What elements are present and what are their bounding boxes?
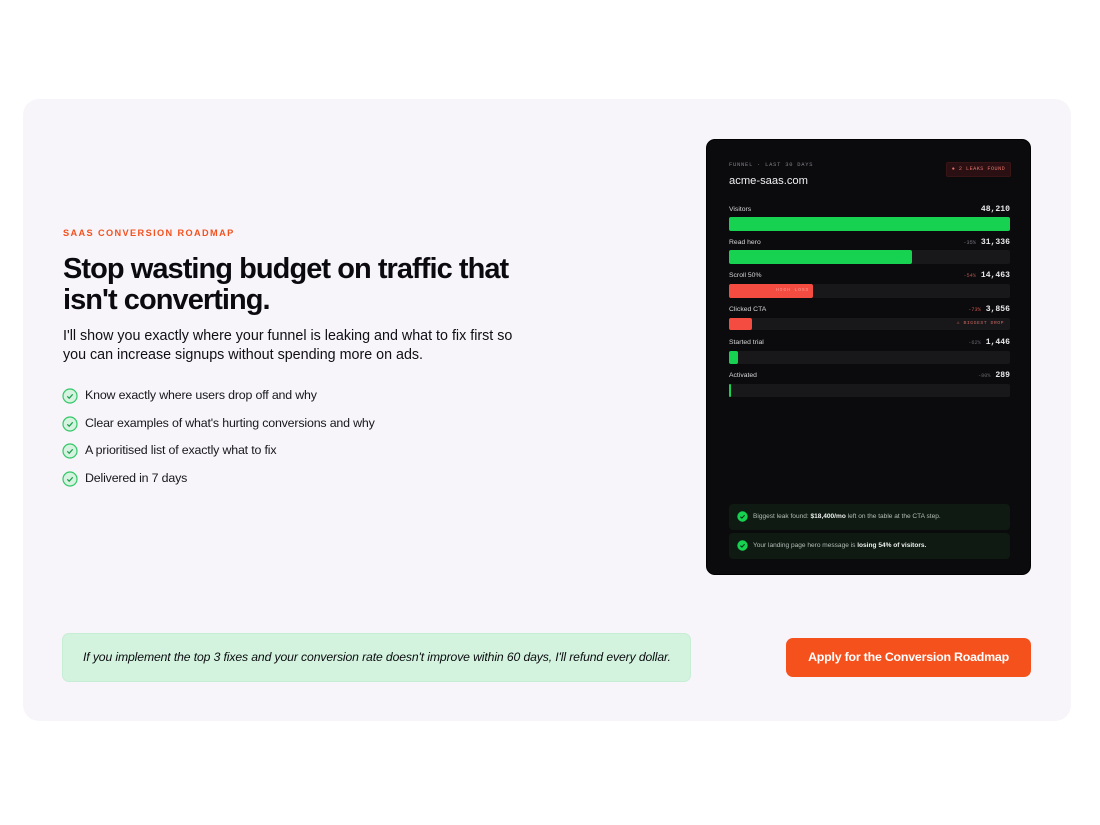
heading: isn't converting. [63,284,270,316]
heading [63,253,509,316]
bar: Clicked CTA: ⚠ BIGGEST DROP [957,321,1004,326]
bar: Scroll 50%: HIGH LOSS [776,288,809,293]
dashboard caption: FUNNEL · LAST 30 DAYS [729,162,813,168]
panel: funnel dashboard [706,139,1031,575]
subheading: you can increase signups without spending more on ads. [63,347,423,363]
insight note [729,533,1010,559]
bar: Clicked CTA [729,318,1010,330]
bar: Visitors [729,217,1010,231]
subheading [63,328,512,363]
guarantee callout [62,633,691,682]
row value: -80% 289 [978,371,1010,380]
benefit text: Clear examples of what's hurting conversions and why [85,416,375,430]
note text: Biggest leak found: $18,400/mo left on the table at the CTA step. [753,513,941,520]
badge: leaks found: ● 2 LEAKS FOUND [952,166,1005,172]
bar: Started trial [729,351,1010,364]
row label: Scroll 50%: Scroll 50% [729,272,762,279]
benefit text: Delivered in 7 days [85,471,187,485]
CTA button: Apply for the Conversion Roadmap [808,650,1009,664]
insight note [729,504,1010,530]
dashboard domain: acme-saas.com [729,175,808,187]
icon: check [737,540,748,551]
panel: main card [23,99,1071,721]
icon: check [62,471,78,487]
benefit text: Know exactly where users drop off and why [85,388,317,402]
icon: check [737,511,748,522]
eyebrow label: SAAS CONVERSION ROADMAP [63,228,235,238]
benefits list [62,388,375,487]
row label: Visitors: Visitors [729,206,751,213]
row value: -54% 14,463 [963,271,1010,280]
row value: -73% 3,856 [968,305,1010,314]
bar: Read hero [729,250,1010,264]
heading: Stop wasting budget on traffic that [63,253,508,285]
row value: -35% 31,336 [963,238,1010,247]
subheading: I'll show you exactly where your funnel is leaking and what to fix first so [63,328,512,344]
note text: Your landing page hero message is losing 54% of visitors. [753,542,926,549]
CTA button [786,638,1031,677]
row label: Activated: Activated [729,372,757,379]
row label: Clicked CTA: Clicked CTA [729,306,766,313]
bar: Activated [729,384,1010,397]
row value: -62% 1,446 [968,338,1010,347]
row value: 48,210 [981,205,1010,214]
icon: check [62,416,78,432]
row label: Read hero: Read hero [729,239,761,246]
bar: Scroll 50% [729,284,1010,298]
funnel chart [729,204,1010,398]
guarantee callout: If you implement the top 3 fixes and your conversion rate doesn't improve within 60 days, I'll refund every dollar. [83,650,671,664]
row label: Started trial: Started trial [729,339,764,346]
badge: leaks found [946,162,1011,177]
benefit text: A prioritised list of exactly what to fix [85,443,276,457]
icon: check [62,388,78,404]
icon: check [62,443,78,459]
